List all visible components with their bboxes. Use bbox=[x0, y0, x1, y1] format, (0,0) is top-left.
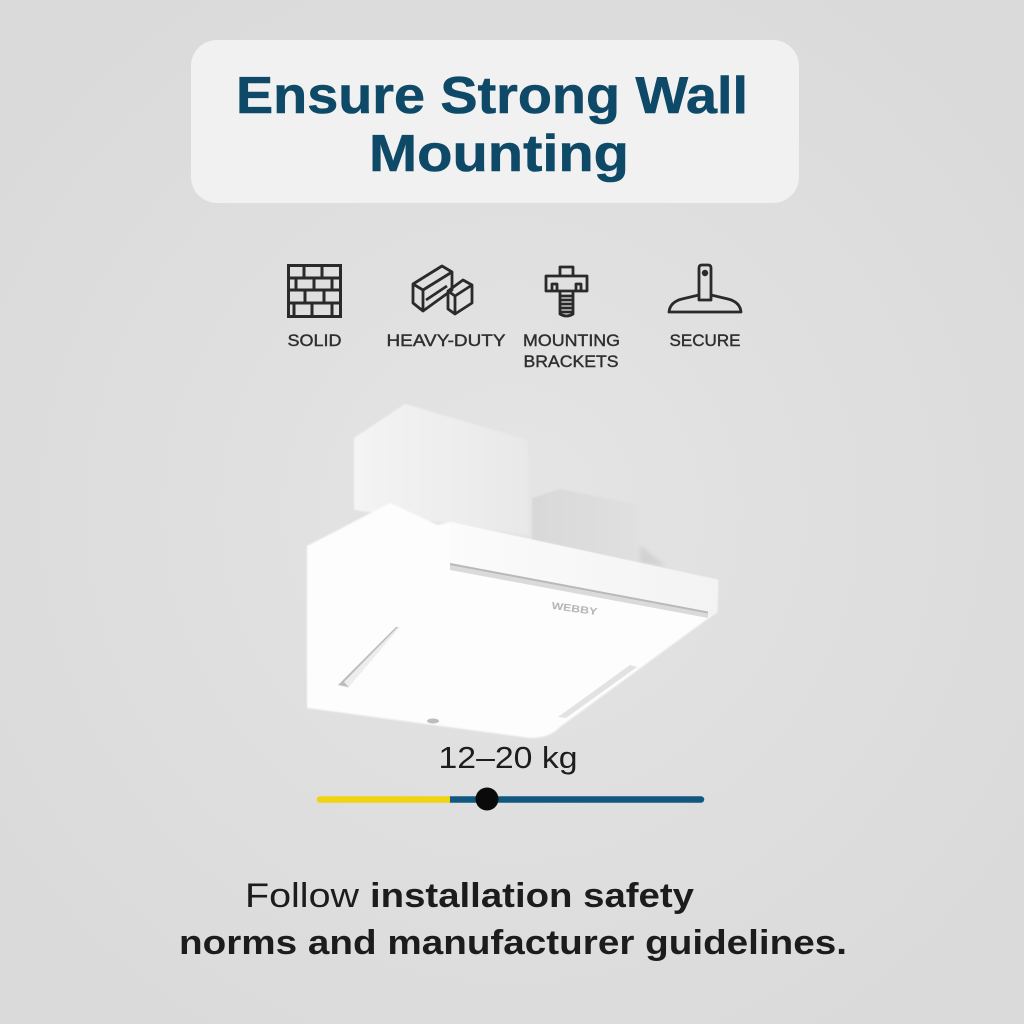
upper chimney bbox=[354, 404, 528, 535]
label: solid: SOLID bbox=[288, 331, 342, 350]
weight range slider bbox=[317, 788, 701, 810]
front slot shadow line bbox=[450, 563, 708, 614]
weight label: 12–20 kg bbox=[438, 740, 578, 775]
icon: secure mount bbox=[669, 265, 741, 312]
chimney shadow bbox=[640, 545, 667, 567]
range hood illustration bbox=[307, 404, 718, 738]
slider blue track bbox=[450, 796, 701, 803]
left vent shadow line bbox=[338, 627, 398, 687]
title text: Mounting bbox=[369, 125, 629, 183]
brand label: WEBBY bbox=[551, 601, 598, 618]
footer note: norms and manufacturer guidelines. bbox=[179, 924, 847, 962]
footer note: installation safety bbox=[370, 877, 694, 915]
hood underside bbox=[307, 503, 718, 738]
slider knob bbox=[476, 788, 498, 810]
lower chimney bbox=[532, 489, 640, 563]
icon: solid brick wall bbox=[288, 265, 341, 316]
icon: heavy-duty blocks bbox=[413, 266, 472, 314]
bottom latch bbox=[427, 718, 439, 724]
hood front band bbox=[450, 522, 718, 617]
title text: Ensure Strong Wall bbox=[236, 67, 748, 125]
title text bbox=[236, 67, 748, 183]
right vent slot bbox=[558, 665, 637, 718]
feature icons row bbox=[288, 265, 741, 371]
label: mounting brackets: MOUNTING bbox=[523, 331, 620, 350]
left vent slot bbox=[338, 627, 400, 688]
title panel bbox=[191, 40, 799, 203]
slider yellow section bbox=[317, 796, 450, 803]
label: secure: SECURE bbox=[670, 331, 740, 350]
label: mounting brackets: BRACKETS bbox=[524, 352, 618, 371]
footer note: Follow bbox=[245, 877, 360, 915]
footer note bbox=[179, 877, 847, 962]
label: mounting brackets bbox=[523, 331, 620, 371]
icon: mounting bracket bolt bbox=[546, 267, 587, 316]
front slot bbox=[450, 563, 708, 618]
label: heavy-duty: HEAVY-DUTY bbox=[386, 331, 506, 350]
